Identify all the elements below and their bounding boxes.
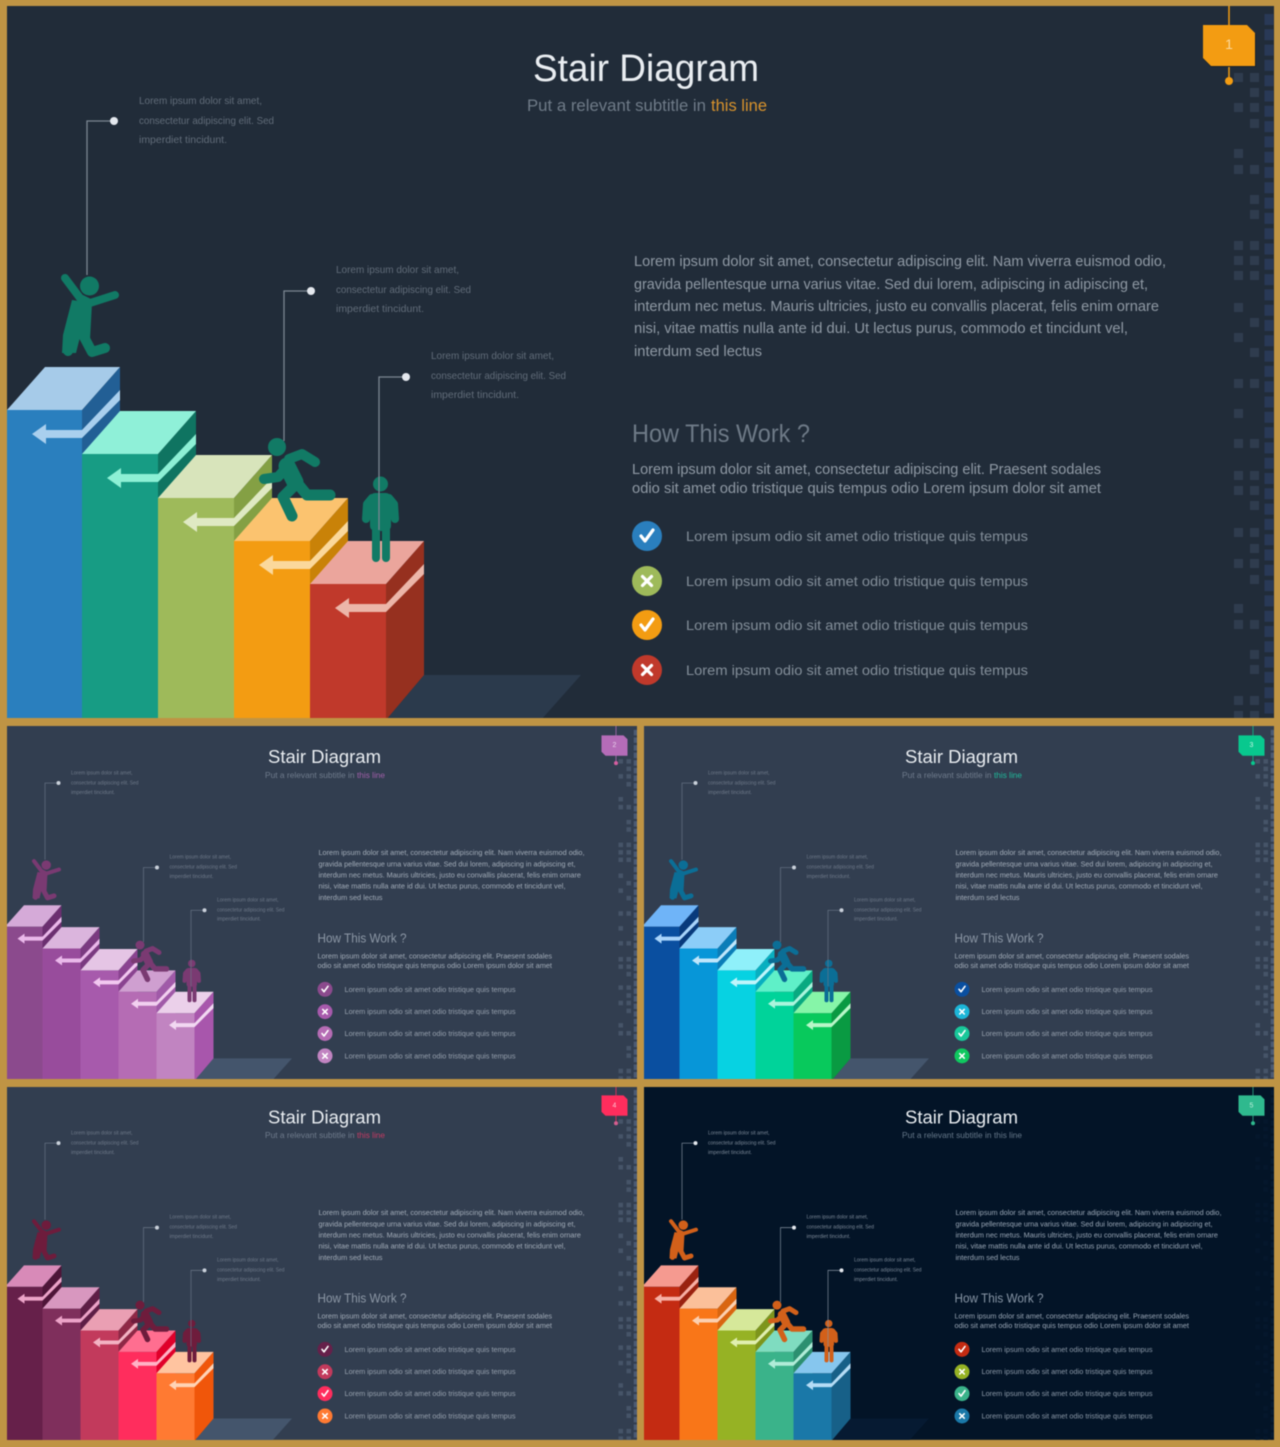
- callout: lower step: Lorem ipsum dolor sit amet,: [217, 897, 278, 903]
- heading: how this work: How This Work ?: [954, 1292, 1044, 1306]
- stair chart: [642, 1265, 850, 1441]
- checklist: Lorem ipsum odio sit amet odio tristique quis tempus: [981, 1369, 1153, 1376]
- callout: top step: [87, 95, 274, 275]
- panel: purple slide: [5, 726, 638, 1081]
- icon: running person: [264, 438, 330, 516]
- text block: intro paragraph: gravida pellentesque urna varius vitae. Sed dui lorem, adipiscing in adipiscing et,: [318, 860, 575, 869]
- callout: lower step: consectetur adipiscing elit. Sed: [217, 1267, 285, 1273]
- text block: intro paragraph: nisi, vitae mattis nulla ante id dui. Ut lectus purus, commodo et tincidunt vel,: [318, 881, 565, 890]
- text block: intro paragraph: Lorem ipsum dolor sit amet, consectetur adipiscing elit. Nam viverra euismod odio,: [955, 1208, 1221, 1217]
- heading: how this work: How This Work ?: [318, 932, 407, 946]
- text block: intro paragraph: Lorem ipsum dolor sit amet, consectetur adipiscing elit. Nam viverra euismod odio,: [318, 848, 584, 857]
- text block: intro paragraph: interdum nec metus. Mauris ultricies, justo eu convallis placerat, felis enim ornare: [634, 299, 1159, 315]
- floor shadow: [194, 1418, 292, 1441]
- text block: intro paragraph: [634, 254, 1166, 360]
- callout: lower step: consectetur adipiscing elit. Sed: [854, 907, 922, 913]
- stair chart: [5, 905, 214, 1081]
- callout: middle step: [284, 264, 471, 441]
- text block: intro paragraph: nisi, vitae mattis nulla ante id dui. Ut lectus purus, commodo et tincidunt vel,: [318, 1242, 565, 1250]
- callout: middle step: [780, 1215, 874, 1302]
- checklist: Lorem ipsum odio sit amet odio tristique quis tempus: [686, 617, 1028, 633]
- text block: intro paragraph: interdum sed lectus: [634, 344, 762, 360]
- title: Stair Diagram: [268, 747, 381, 768]
- callout: top step: Lorem ipsum dolor sit amet,: [71, 771, 132, 777]
- text block: intro paragraph: interdum sed lectus: [318, 1253, 383, 1262]
- callout: middle step: imperdiet tincidunt.: [806, 874, 850, 880]
- icon: jumping person: [62, 276, 115, 353]
- checklist: Lorem ipsum odio sit amet odio tristique quis tempus: [981, 1391, 1153, 1398]
- text block: intro paragraph: interdum sed lectus: [955, 1253, 1020, 1262]
- callout: top step: Lorem ipsum dolor sit amet,: [71, 1131, 132, 1137]
- text block: intro paragraph: nisi, vitae mattis nulla ante id dui. Ut lectus purus, commodo et tincidunt vel,: [955, 1242, 1202, 1250]
- text block: intro paragraph: nisi, vitae mattis nulla ante id dui. Ut lectus purus, commodo et tincidunt vel,: [955, 881, 1202, 890]
- icon: running person: [770, 1301, 804, 1339]
- icon: jumping person: [670, 860, 696, 898]
- callout: top step: imperdiet tincidunt.: [708, 790, 752, 796]
- checklist: Lorem ipsum odio sit amet odio tristique quis tempus: [686, 573, 1028, 589]
- stair chart: [5, 1265, 214, 1441]
- callout: middle step: [144, 1215, 237, 1302]
- page tag 5: [1238, 1086, 1264, 1125]
- checklist: Lorem ipsum odio sit amet odio tristique quis tempus: [981, 1009, 1153, 1016]
- text block: intro paragraph: [318, 848, 584, 902]
- floor shadow: [386, 675, 581, 720]
- text block: intro paragraph: interdum nec metus. Mauris ultricies, justo eu convallis placerat, felis enim ornare: [955, 870, 1218, 879]
- checklist: Lorem ipsum odio sit amet odio tristique quis tempus: [981, 1347, 1153, 1354]
- text block: intro paragraph: Lorem ipsum dolor sit amet, consectetur adipiscing elit. Nam viverra euismod odio,: [955, 848, 1221, 857]
- page tag 3: [1238, 726, 1264, 765]
- checklist: Lorem ipsum odio sit amet odio tristique quis tempus: [344, 1391, 516, 1398]
- text block: intro paragraph: nisi, vitae mattis nulla ante id dui. Ut lectus purus, commodo et tincidunt vel,: [634, 321, 1128, 337]
- callout: lower step: imperdiet tincidunt.: [217, 1277, 261, 1283]
- icon: standing person: [822, 1320, 836, 1360]
- icon: running person: [134, 941, 166, 979]
- callout: lower step: [828, 1257, 922, 1346]
- text block: how this work description: odio sit amet odio tristique quis tempus odio Lorem ipsum dolor sit amet: [632, 481, 1101, 497]
- icon: jumping person: [32, 1220, 59, 1258]
- callout: top step: imperdiet tincidunt.: [71, 1150, 115, 1156]
- callout: lower step: imperdiet tincidunt.: [217, 917, 261, 923]
- subtitle: this line: [994, 770, 1022, 780]
- text block: how this work description: odio sit amet odio tristique quis tempus odio Lorem ipsum dolor sit amet: [954, 1321, 1189, 1330]
- checklist: [318, 982, 516, 1063]
- callout: middle step: imperdiet tincidunt.: [336, 303, 424, 315]
- callout: lower step: consectetur adipiscing elit. Sed: [854, 1267, 922, 1273]
- page tag 1: [1203, 6, 1256, 85]
- subtitle: this line: [357, 770, 385, 780]
- checklist: Lorem ipsum odio sit amet odio tristique quis tempus: [344, 1413, 516, 1420]
- callout: lower step: Lorem ipsum dolor sit amet,: [431, 350, 554, 362]
- heading: how this work: How This Work ?: [632, 420, 810, 448]
- title: Stair Diagram: [533, 48, 759, 90]
- callout: top step: Lorem ipsum dolor sit amet,: [708, 1131, 769, 1137]
- text block: intro paragraph: interdum nec metus. Mauris ultricies, justo eu convallis placerat, felis enim ornare: [318, 1231, 581, 1240]
- text block: intro paragraph: [318, 1208, 584, 1262]
- callout: top step: imperdiet tincidunt.: [139, 134, 227, 146]
- page tag 3: 3: [1250, 742, 1254, 749]
- page tag 4: 4: [613, 1102, 617, 1109]
- callout: lower step: consectetur adipiscing elit. Sed: [217, 907, 285, 913]
- text block: intro paragraph: [956, 1208, 1222, 1262]
- icon: running person: [134, 1301, 166, 1339]
- text block: intro paragraph: gravida pellentesque urna varius vitae. Sed dui lorem, adipiscing in adipiscing et,: [955, 860, 1212, 869]
- page tag 4: [602, 1086, 628, 1125]
- callout: top step: [682, 771, 776, 860]
- subtitle: this line: [357, 1130, 385, 1140]
- text block: how this work description: odio sit amet odio tristique quis tempus odio Lorem ipsum dolor sit amet: [954, 961, 1189, 970]
- text block: intro paragraph: interdum sed lectus: [318, 893, 383, 902]
- subtitle: this line: [994, 1130, 1022, 1140]
- callout: top step: [45, 771, 139, 860]
- callout: top step: consectetur adipiscing elit. Sed: [71, 781, 139, 787]
- callout: middle step: consectetur adipiscing elit. Sed: [336, 284, 471, 296]
- callout: middle step: imperdiet tincidunt.: [806, 1234, 850, 1240]
- page tag 2: [602, 726, 628, 765]
- text block: intro paragraph: gravida pellentesque urna varius vitae. Sed dui lorem, adipiscing in adipiscing et,: [634, 277, 1148, 293]
- callout: top step: imperdiet tincidunt.: [708, 1150, 752, 1156]
- checklist: Lorem ipsum odio sit amet odio tristique quis tempus: [344, 1053, 516, 1060]
- icon: jumping person: [32, 860, 59, 898]
- icon: standing person: [822, 960, 836, 1000]
- subtitle: this line: [711, 96, 767, 115]
- page tag 5: 5: [1250, 1102, 1254, 1109]
- text block: intro paragraph: [956, 848, 1222, 902]
- checklist: Lorem ipsum odio sit amet odio tristique quis tempus: [981, 1413, 1153, 1420]
- checklist: Lorem ipsum odio sit amet odio tristique quis tempus: [344, 1347, 516, 1354]
- callout: middle step: [780, 855, 874, 942]
- callout: lower step: Lorem ipsum dolor sit amet,: [217, 1257, 278, 1263]
- text block: how this work description: odio sit amet odio tristique quis tempus odio Lorem ipsum dolor sit amet: [318, 961, 552, 970]
- callout: top step: imperdiet tincidunt.: [71, 790, 115, 796]
- callout: top step: [682, 1131, 776, 1220]
- callout: lower step: [191, 897, 285, 986]
- page tag 1: 1: [1225, 36, 1233, 52]
- checklist: Lorem ipsum odio sit amet odio tristique quis tempus: [686, 662, 1028, 678]
- callout: top step: consectetur adipiscing elit. Sed: [71, 1141, 139, 1147]
- checklist: [954, 1342, 1153, 1423]
- callout: middle step: imperdiet tincidunt.: [170, 874, 213, 880]
- stair chart: [7, 367, 424, 720]
- callout: middle step: Lorem ipsum dolor sit amet,: [170, 855, 231, 861]
- checklist: [318, 1342, 516, 1423]
- callout: lower step: Lorem ipsum dolor sit amet,: [854, 1257, 916, 1263]
- stair chart: [642, 905, 850, 1081]
- checklist: Lorem ipsum odio sit amet odio tristique quis tempus: [344, 1369, 516, 1376]
- callout: lower step: [828, 897, 922, 986]
- floor shadow: [194, 1058, 292, 1081]
- heading: how this work: How This Work ?: [318, 1292, 407, 1306]
- text block: how this work description: Lorem ipsum dolor sit amet, consectetur adipiscing elit. Praesent sodales: [954, 1312, 1189, 1321]
- text block: how this work description: Lorem ipsum dolor sit amet, consectetur adipiscing elit. Praesent sodales: [632, 462, 1101, 478]
- callout: middle step: Lorem ipsum dolor sit amet,: [336, 264, 459, 276]
- callout: middle step: consectetur adipiscing elit. Sed: [806, 1225, 874, 1231]
- callout: top step: consectetur adipiscing elit. Sed: [708, 781, 776, 787]
- title: Stair Diagram: [905, 1107, 1018, 1128]
- floor shadow: [832, 1058, 929, 1081]
- text block: how this work description: Lorem ipsum dolor sit amet, consectetur adipiscing elit. Praesent sodales: [318, 951, 552, 960]
- heading: how this work: How This Work ?: [954, 932, 1044, 946]
- callout: middle step: consectetur adipiscing elit. Sed: [806, 865, 874, 871]
- callout: lower step: Lorem ipsum dolor sit amet,: [854, 897, 916, 903]
- checklist: Lorem ipsum odio sit amet odio tristique quis tempus: [981, 1053, 1153, 1060]
- title: Stair Diagram: [268, 1107, 381, 1128]
- icon: standing person: [366, 476, 395, 558]
- icon: standing person: [184, 1320, 199, 1360]
- panel: blue-green slide: [642, 726, 1276, 1081]
- text block: how this work description: Lorem ipsum dolor sit amet, consectetur adipiscing elit. Praesent sodales: [318, 1312, 552, 1321]
- text block: intro paragraph: Lorem ipsum dolor sit amet, consectetur adipiscing elit. Nam viverra euismod odio,: [318, 1208, 584, 1217]
- callout: middle step: [144, 855, 237, 942]
- callout: middle step: Lorem ipsum dolor sit amet,: [170, 1215, 231, 1221]
- callout: middle step: consectetur adipiscing elit. Sed: [170, 865, 237, 871]
- callout: lower step: [191, 1257, 285, 1346]
- callout: middle step: imperdiet tincidunt.: [170, 1234, 213, 1240]
- callout: middle step: Lorem ipsum dolor sit amet,: [806, 855, 868, 861]
- checklist: [632, 521, 1028, 685]
- callout: lower step: imperdiet tincidunt.: [431, 389, 519, 401]
- callout: middle step: consectetur adipiscing elit. Sed: [170, 1225, 237, 1231]
- callout: lower step: consectetur adipiscing elit. Sed: [431, 370, 566, 382]
- callout: lower step: imperdiet tincidunt.: [854, 1277, 898, 1283]
- checklist: Lorem ipsum odio sit amet odio tristique quis tempus: [981, 1031, 1153, 1038]
- subtitle: Put a relevant subtitle in: [902, 1130, 992, 1140]
- text block: intro paragraph: Lorem ipsum dolor sit amet, consectetur adipiscing elit. Nam viverra euismod odio,: [634, 254, 1166, 270]
- checklist: Lorem ipsum odio sit amet odio tristique quis tempus: [344, 987, 516, 994]
- text block: how this work description: [954, 951, 1189, 970]
- callout: top step: [45, 1131, 139, 1220]
- icon: standing person: [184, 960, 199, 1000]
- text block: how this work description: Lorem ipsum dolor sit amet, consectetur adipiscing elit. Praesent sodales: [954, 951, 1189, 960]
- checklist: Lorem ipsum odio sit amet odio tristique quis tempus: [981, 987, 1153, 994]
- text block: how this work description: [632, 462, 1101, 497]
- callout: top step: Lorem ipsum dolor sit amet,: [708, 771, 769, 777]
- page tag 2: 2: [613, 742, 617, 749]
- text block: how this work description: [954, 1312, 1189, 1330]
- callout: lower step: [379, 350, 566, 530]
- text block: intro paragraph: interdum nec metus. Mauris ultricies, justo eu convallis placerat, felis enim ornare: [318, 870, 581, 879]
- text block: intro paragraph: interdum nec metus. Mauris ultricies, justo eu convallis placerat, felis enim ornare: [955, 1231, 1218, 1240]
- panel: crimson slide: [5, 1086, 638, 1441]
- callout: top step: consectetur adipiscing elit. Sed: [708, 1141, 776, 1147]
- callout: lower step: imperdiet tincidunt.: [854, 917, 898, 923]
- panel: navy slide: [642, 1086, 1276, 1441]
- checklist: Lorem ipsum odio sit amet odio tristique quis tempus: [344, 1009, 516, 1016]
- checklist: Lorem ipsum odio sit amet odio tristique quis tempus: [344, 1031, 516, 1038]
- floor shadow: [832, 1418, 929, 1441]
- text block: how this work description: [318, 1312, 552, 1330]
- subtitle: Put a relevant subtitle in: [527, 96, 706, 115]
- subtitle: Put a relevant subtitle in: [265, 770, 355, 780]
- subtitle: Put a relevant subtitle in: [902, 770, 992, 780]
- icon: jumping person: [670, 1220, 696, 1258]
- text block: how this work description: [318, 951, 552, 970]
- checklist: Lorem ipsum odio sit amet odio tristique quis tempus: [686, 528, 1028, 544]
- panel: main slide (orange theme): [7, 6, 1274, 720]
- callout: top step: consectetur adipiscing elit. Sed: [139, 115, 274, 127]
- subtitle: Put a relevant subtitle in: [265, 1130, 355, 1140]
- callout: middle step: Lorem ipsum dolor sit amet,: [806, 1215, 868, 1221]
- text block: intro paragraph: gravida pellentesque urna varius vitae. Sed dui lorem, adipiscing in adipiscing et,: [955, 1220, 1212, 1229]
- text block: how this work description: odio sit amet odio tristique quis tempus odio Lorem ipsum dolor sit amet: [318, 1321, 552, 1330]
- title: Stair Diagram: [905, 747, 1018, 768]
- text block: intro paragraph: interdum sed lectus: [955, 893, 1020, 902]
- text block: intro paragraph: gravida pellentesque urna varius vitae. Sed dui lorem, adipiscing in adipiscing et,: [318, 1220, 575, 1229]
- icon: running person: [770, 941, 804, 979]
- checklist: [954, 982, 1153, 1063]
- callout: top step: Lorem ipsum dolor sit amet,: [139, 95, 262, 107]
